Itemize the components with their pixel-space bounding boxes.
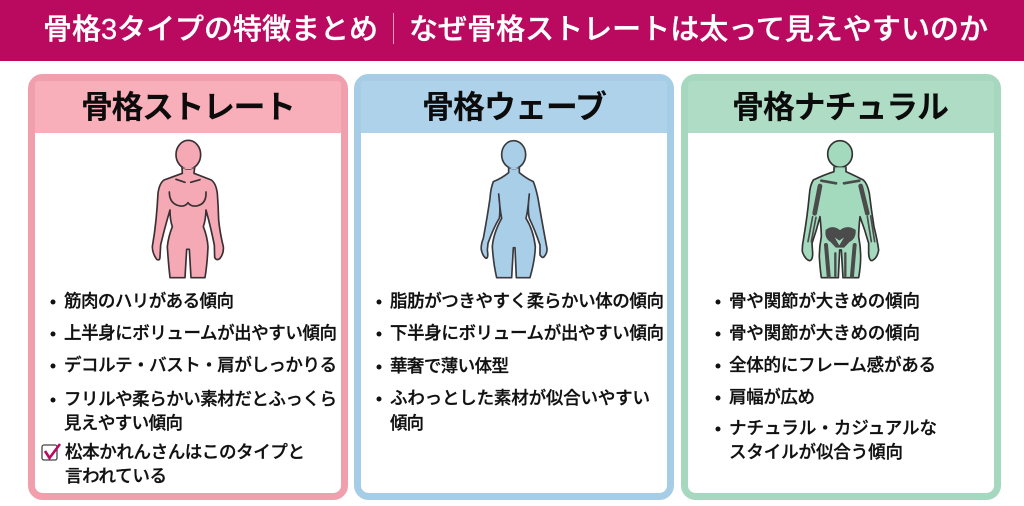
panel: natural <box>684 78 998 496</box>
list: natural: 骨や関節が大きめの傾向 <box>729 291 920 311</box>
list: wave <box>376 291 664 433</box>
list: straight: 見えやすい傾向 <box>64 413 183 433</box>
list: straight: 上半身にボリュームが出やすい傾向 <box>64 323 337 343</box>
list: wave: 脂肪がつきやすく柔らかい体の傾向 <box>390 291 664 311</box>
callout: Matsumoto Karen: 松本かれんさんはこのタイプと <box>65 442 305 462</box>
list: natural: 全体的にフレーム感がある <box>729 355 936 375</box>
heading: wave: 骨格ウェーブ <box>422 89 607 125</box>
list: straight: 筋肉のハリがある傾向 <box>64 291 234 311</box>
heading: natural: 骨格ナチュラル <box>732 89 949 125</box>
title text right: なぜ骨格ストレートは太って見えやすいのか <box>409 13 988 46</box>
list: wave: 傾向 <box>390 413 424 433</box>
list: natural <box>716 291 937 462</box>
icon: natural body figure with skeleton <box>802 141 879 278</box>
callout: Matsumoto Karen: 言われている <box>65 466 167 486</box>
list: straight: フリルや柔らかい素材だとふっくら <box>64 389 337 409</box>
list: straight <box>50 291 337 433</box>
panel: straight <box>32 78 344 496</box>
panel: wave <box>358 78 670 496</box>
icon: checkbox <box>42 444 60 460</box>
heading: straight: 骨格ストレート <box>81 89 296 125</box>
list: straight: デコルテ・バスト・肩がしっかりる <box>64 355 337 375</box>
list: natural: ナチュラル・カジュアルな <box>729 418 937 438</box>
icon: straight body figure <box>152 140 223 278</box>
title text left: 骨格3タイプの特徴まとめ <box>43 13 378 46</box>
list: natural: スタイルが似合う傾向 <box>729 442 903 462</box>
title banner <box>0 0 1024 61</box>
list: wave: 下半身にボリュームが出やすい傾向 <box>390 323 664 343</box>
icon: wave body figure <box>481 141 547 278</box>
callout: Matsumoto Karen <box>65 442 305 486</box>
list: wave: 華奢で薄い体型 <box>390 356 509 376</box>
list: wave: ふわっとした素材が似合いやすい <box>390 388 650 408</box>
list: natural: 肩幅が広め <box>729 387 815 407</box>
list: natural: 骨や関節が大きめの傾向 <box>729 323 920 343</box>
